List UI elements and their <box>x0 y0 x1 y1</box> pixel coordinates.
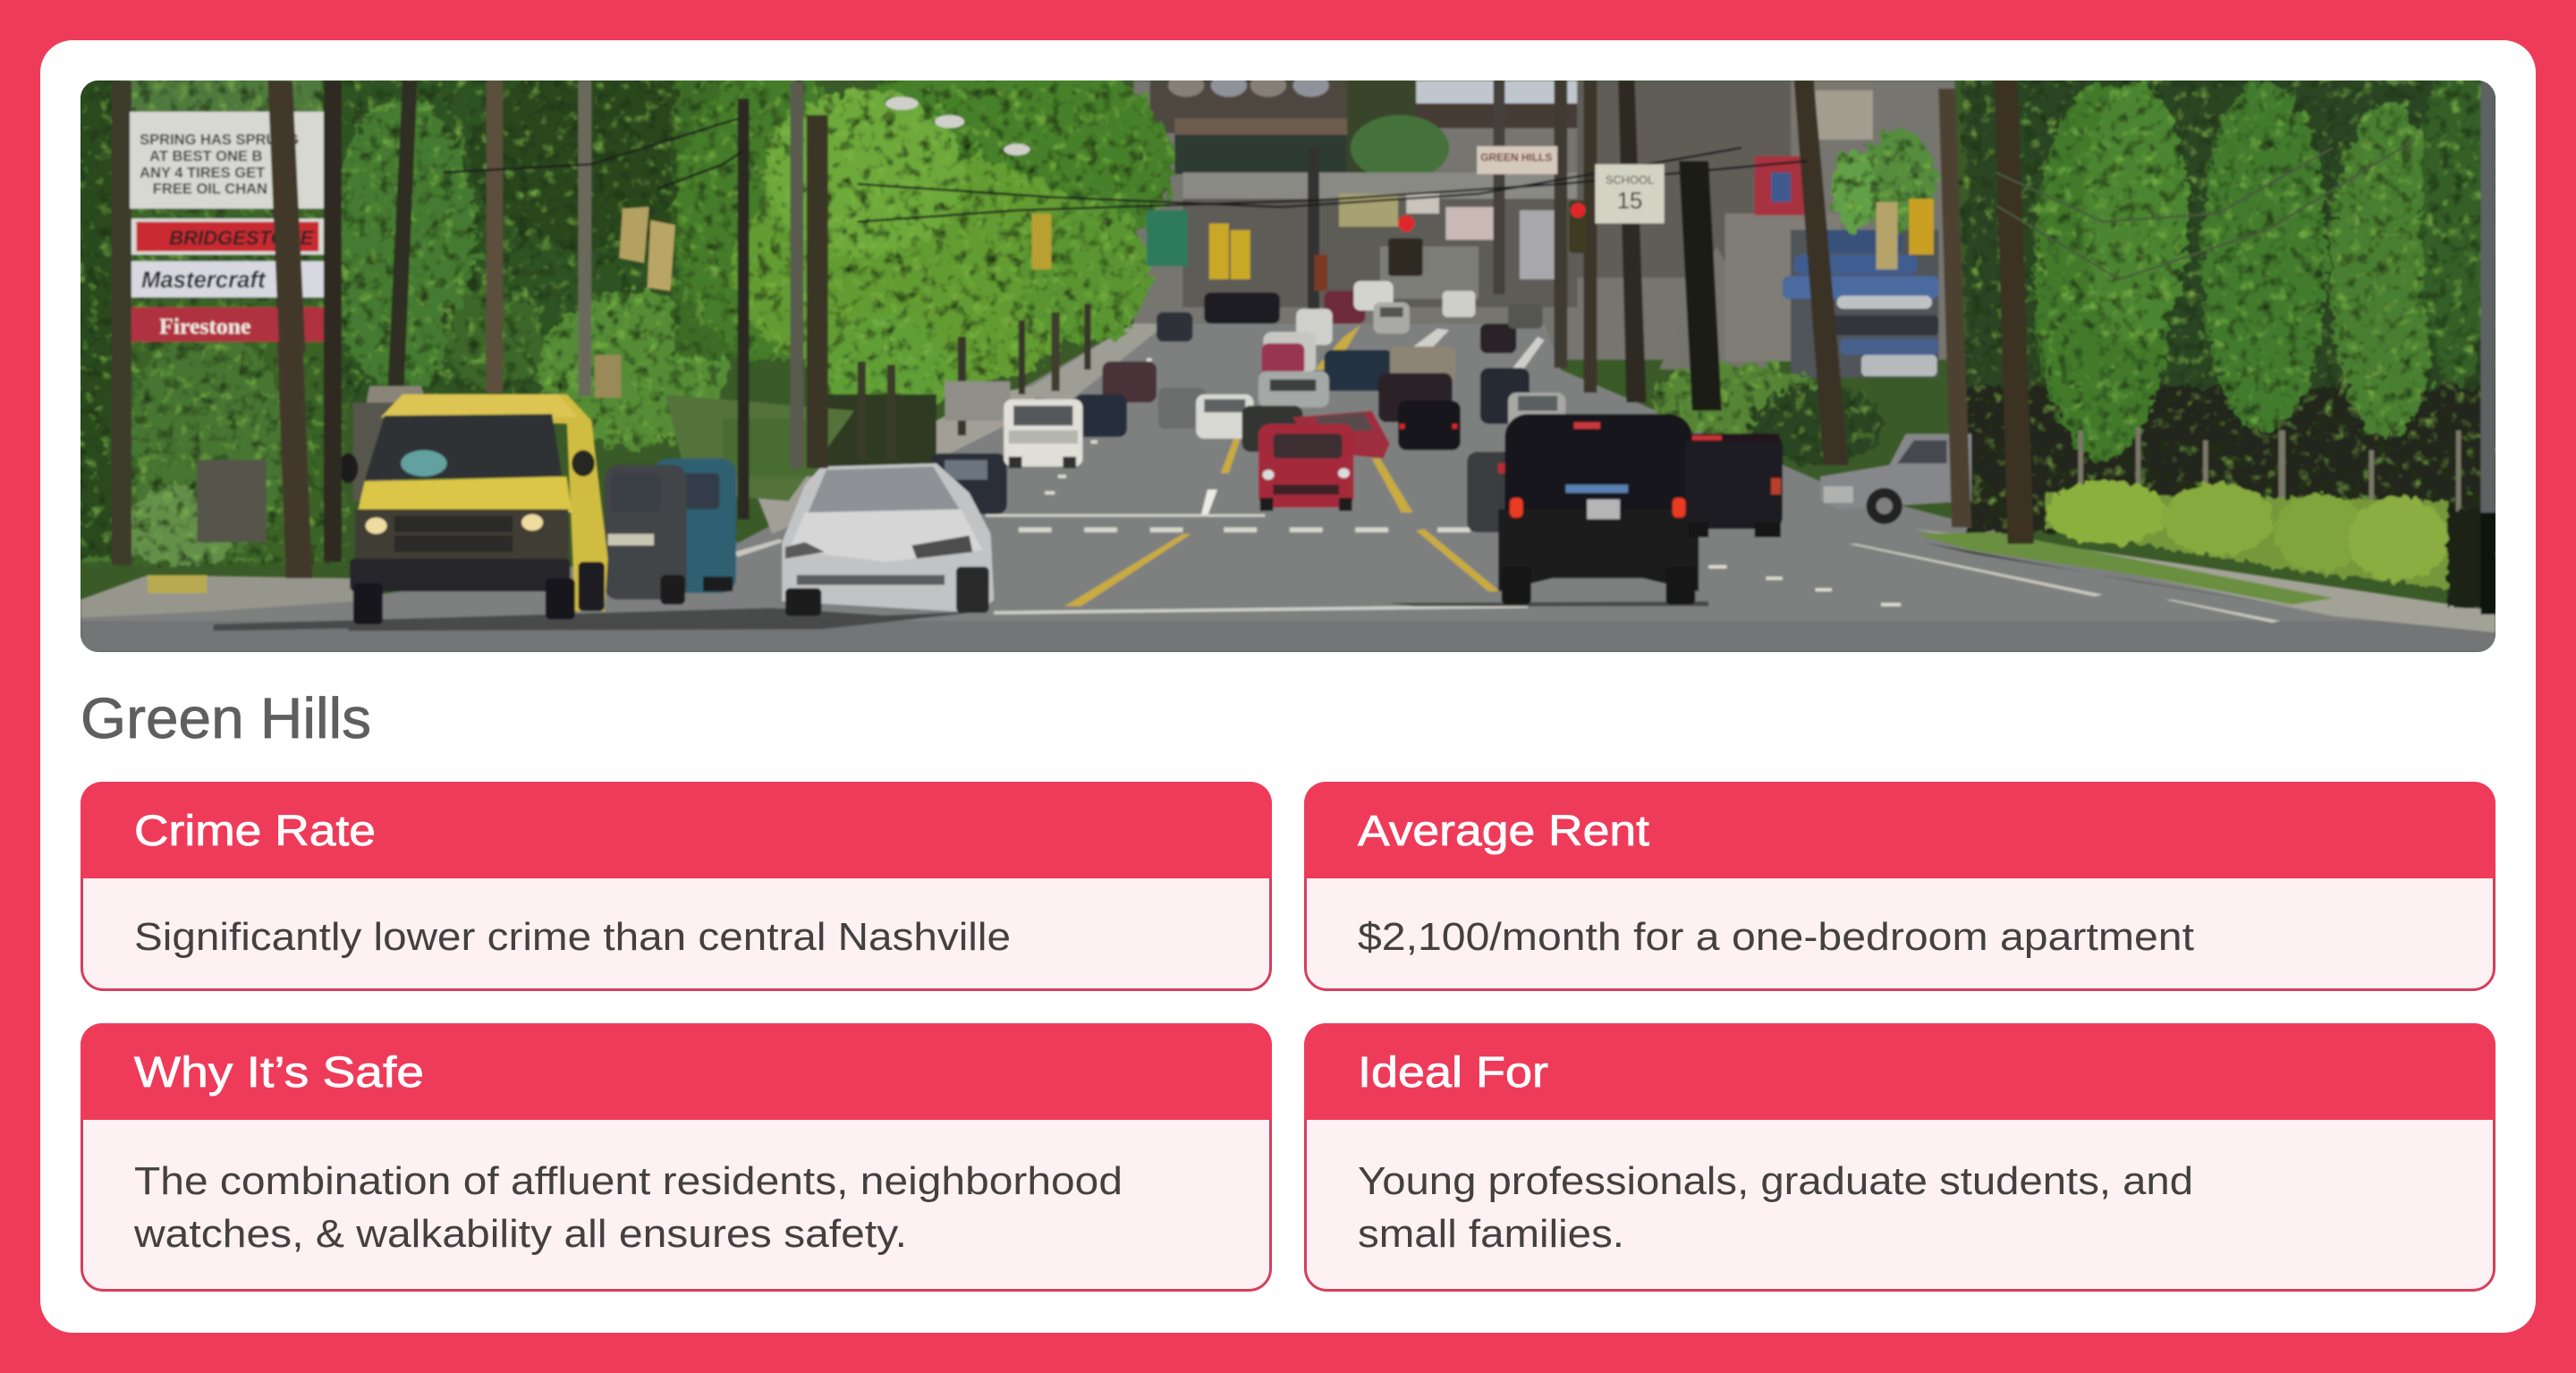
foliage: right poplar trees <box>1651 41 2505 534</box>
panel title: Ideal For: Ideal For <box>1358 1049 1548 1097</box>
icon: gray pickup truck <box>1820 434 1971 524</box>
panel: Average Rent <box>1304 782 2496 989</box>
sign: tire shop marquee: FREE OIL CHAN <box>153 181 267 198</box>
icon: red hatchback <box>1258 424 1353 511</box>
parked cars lot <box>1783 230 1938 377</box>
tree trunks and dark undergrowth <box>197 304 1091 542</box>
lane markings <box>734 328 2280 623</box>
panel text: target residents: Young professionals, graduate students, and <box>1358 1159 2193 1203</box>
foliage: left tree line <box>65 49 1174 567</box>
panel text: target residents <box>1358 1159 2193 1256</box>
sign: tire shop marquee <box>130 81 324 353</box>
panel text: crime comparison: Significantly lower crime than central Nashville <box>134 915 1011 959</box>
icon: white pickup truck <box>1004 399 1082 468</box>
sign: Green Hills: GREEN HILLS <box>1480 151 1552 164</box>
panel text: target residents: small families. <box>1358 1212 1624 1256</box>
panel text: rent figure: $2,100/month for a one-bedroom apartment <box>1358 915 2194 959</box>
panel text: safety reasons: The combination of affluent residents, neighborhood <box>134 1159 1123 1203</box>
photo: Green Hills street scene <box>65 41 2505 652</box>
icon: dark SUV <box>1685 434 1783 538</box>
sign: tire shop marquee: Firestone <box>159 313 250 339</box>
heading: Green Hills: Green Hills <box>80 686 371 750</box>
sign: tire shop marquee: ANY 4 TIRES GET <box>140 164 265 181</box>
panel: Crime Rate <box>80 782 1272 989</box>
icon: yellow van <box>338 394 608 624</box>
poles <box>112 81 2496 614</box>
panel title: Crime Rate: Crime Rate <box>134 808 376 855</box>
icon: dark sedan <box>605 465 687 605</box>
street lamps <box>886 97 1030 156</box>
sign: tire shop marquee: AT BEST ONE B <box>149 148 263 165</box>
traffic lights <box>595 199 1934 397</box>
shadows under cars <box>348 601 1708 631</box>
panel text: safety reasons: watches, & walkability all ensures safety. <box>133 1212 907 1256</box>
sign: tire shop marquee: BRIDGESTONE <box>169 227 315 250</box>
sign: school speed limit <box>1595 165 1665 224</box>
yellow center lines <box>1064 326 1500 606</box>
sign: Green Hills <box>1477 146 1557 174</box>
icon: distant traffic cars <box>930 281 1565 532</box>
icon: black SUV <box>1498 414 1699 605</box>
icon: teal car <box>654 458 736 593</box>
sign: school speed limit: 15 <box>1617 189 1642 214</box>
sign: tire shop marquee: Mastercraft <box>141 267 267 292</box>
panel: Ideal For <box>1304 1023 2496 1290</box>
tree stems <box>2078 428 2461 516</box>
hedge <box>2046 479 2497 608</box>
highway sign <box>1147 210 1188 267</box>
panel title: Why It's Safe: Why It’s Safe <box>134 1049 424 1097</box>
icon: silver Mustang <box>782 463 994 616</box>
sign: school speed limit: SCHOOL <box>1606 174 1654 187</box>
panel text: safety reasons <box>133 1159 1123 1256</box>
overhead wires <box>444 118 2415 279</box>
road surface <box>80 324 2496 652</box>
panel: Why It's Safe <box>80 1023 1272 1290</box>
sign: tire shop marquee: SPRING HAS SPRUNG <box>140 131 299 148</box>
hedge and sidewalk <box>1914 529 2496 632</box>
panel title: Average Rent: Average Rent <box>1358 808 1649 855</box>
backdrop: distant buildings and billboards <box>1133 74 1955 369</box>
